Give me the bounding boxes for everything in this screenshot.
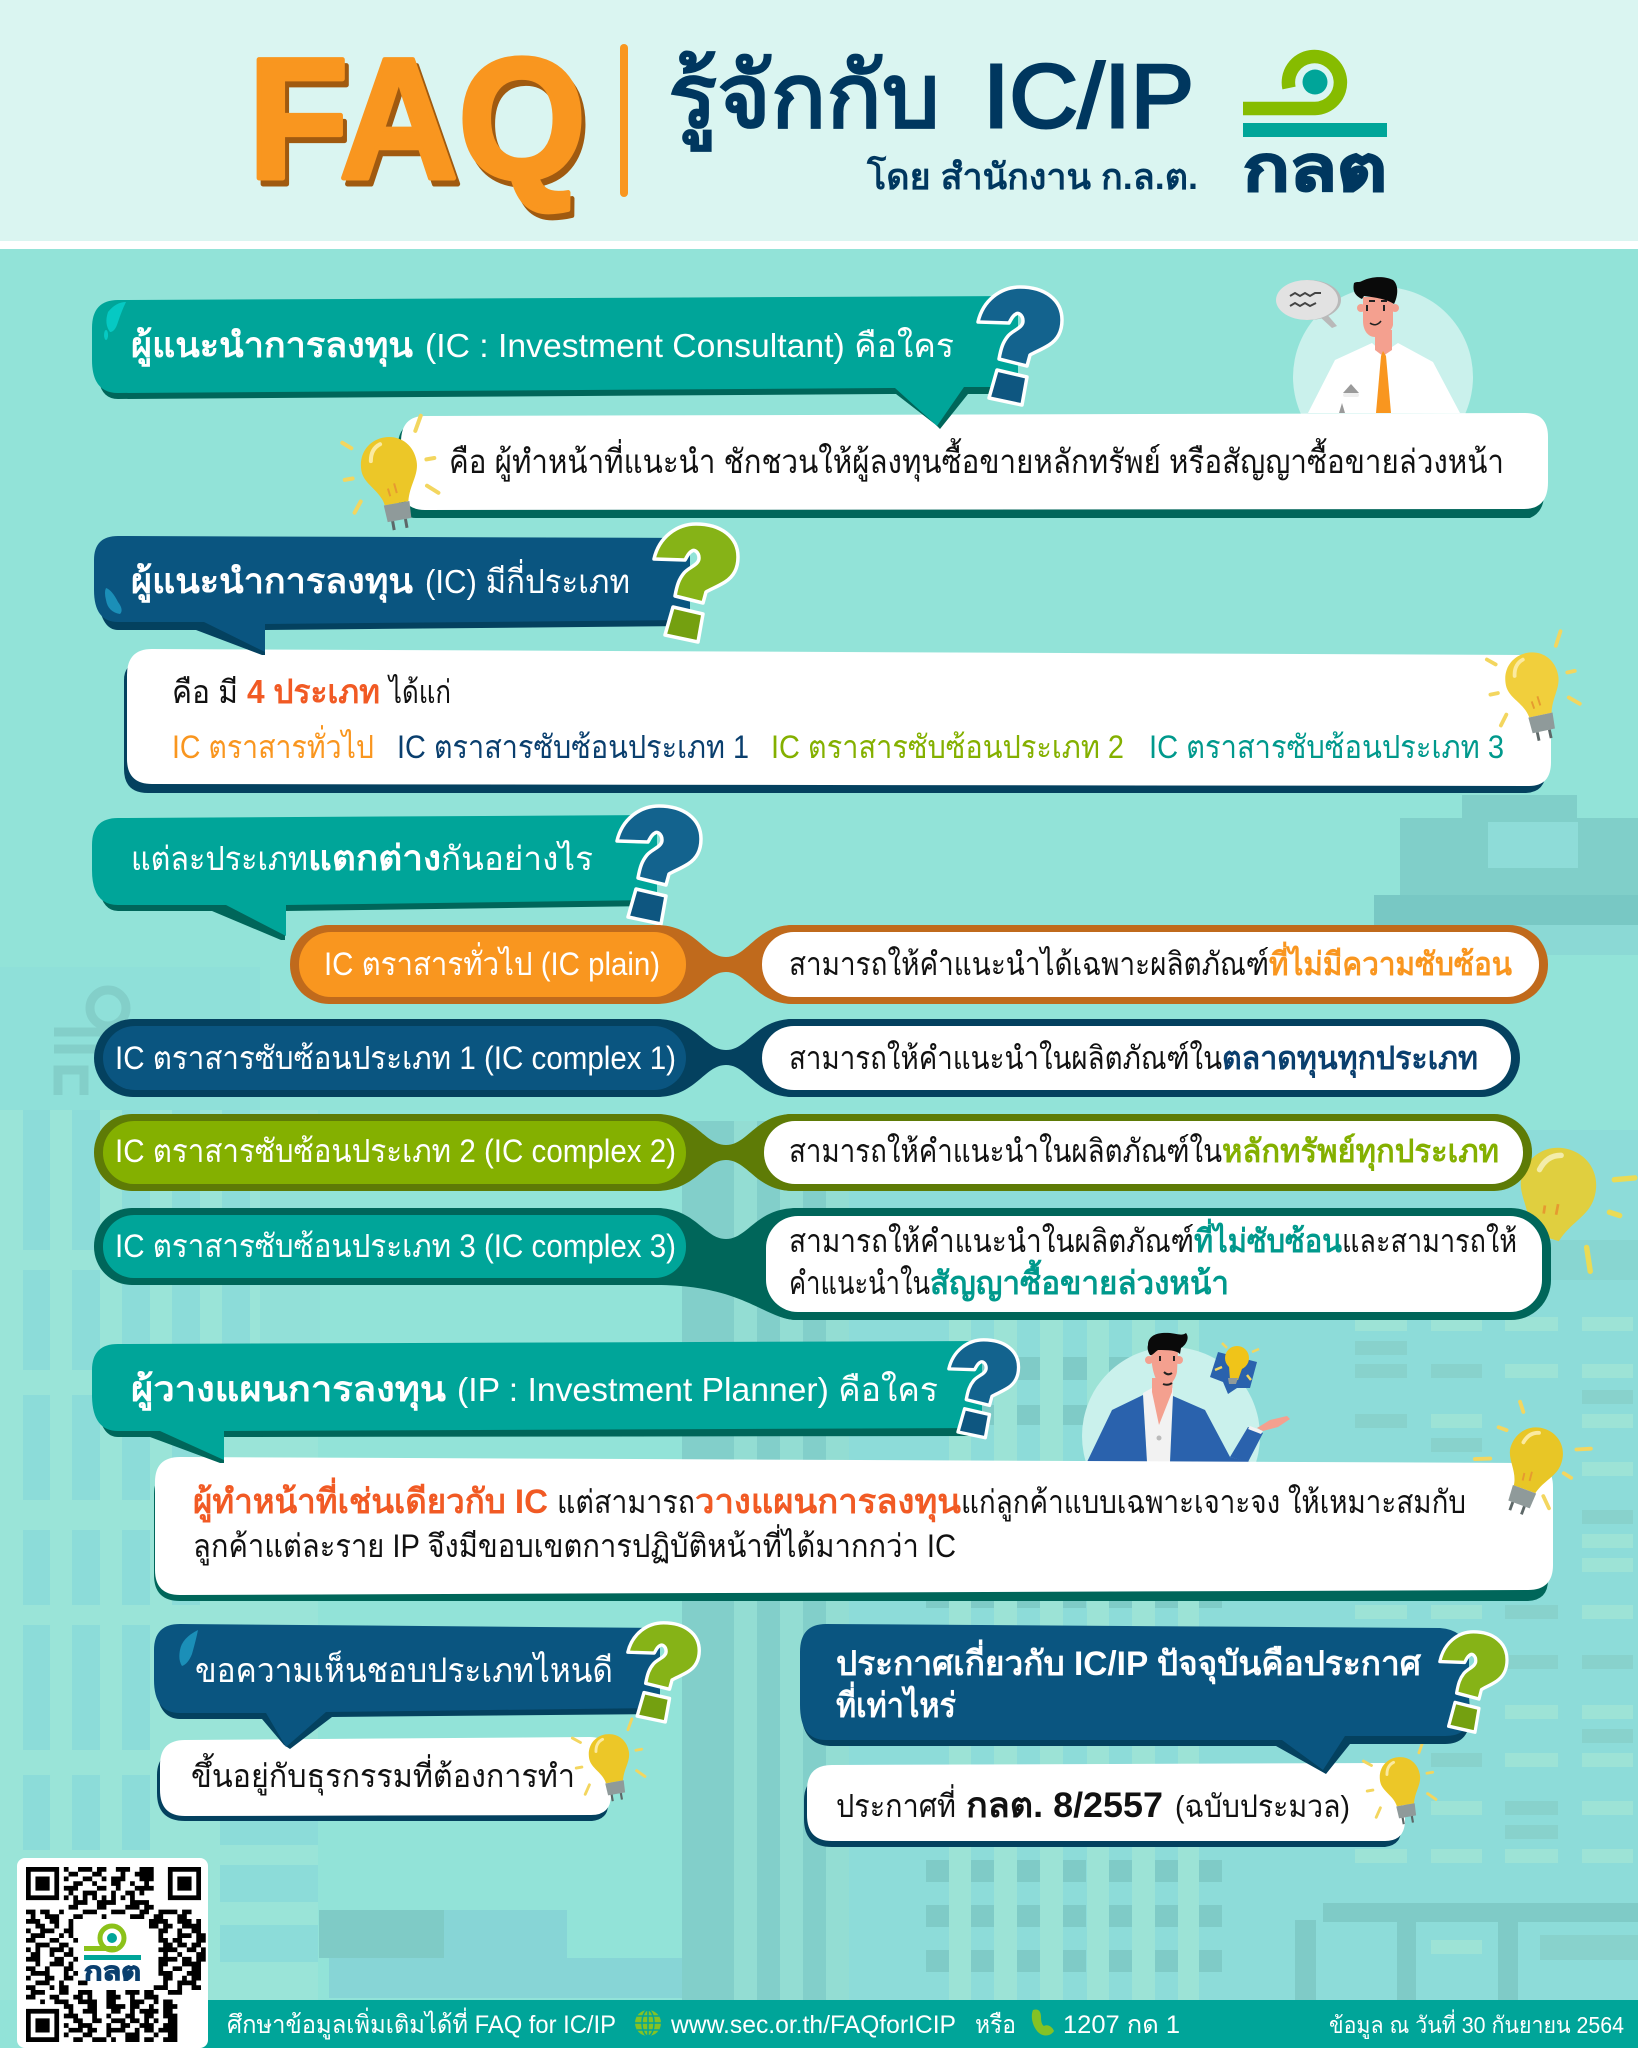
row: IC plain: สามารถให้คำแนะนำได้เฉพาะผลิตภัณฑ์ xyxy=(789,946,1269,982)
heading bubble: which type is suitable xyxy=(154,1624,660,1749)
answer panel: four types xyxy=(124,649,1551,793)
answer panel: current notification xyxy=(804,1763,1405,1847)
illustration: consultant man xyxy=(1293,277,1473,467)
answer panel: IP definition: แก่ลูกค้าแบบเฉพาะเจาะจง ให้เหมาะสมกับ xyxy=(961,1484,1466,1522)
row: IC complex 1: สามารถให้คำแนะนำในผลิตภัณฑ์ใน xyxy=(789,1040,1222,1076)
footer text: data date: ข้อมูล ณ วันที่ 30 กันยายน 2564 xyxy=(1329,2009,1624,2039)
icon: question mark blue xyxy=(617,806,701,924)
heading bubble: how types differ: กันอย่างไร xyxy=(441,840,593,877)
icon: light bulb 1 xyxy=(336,415,445,537)
answer panel: depends on transaction: ขึ้นอยู่กับธุรกรรมที่ต้องการทำ xyxy=(191,1753,575,1796)
heading bubble: how types differ: แต่ละประเภท xyxy=(131,840,308,877)
heading bubble: who is IC xyxy=(92,296,1018,429)
heading bubble: who is IP: ผู้วางแผนการลงทุน xyxy=(131,1370,446,1411)
answer panel: IP definition: ลูกค้าแต่ละราย IP จึงมีขอบเขตการปฏิบัติหน้าที่ได้มากกว่า IC xyxy=(193,1524,956,1566)
header: title: IC/IP xyxy=(983,47,1194,147)
heading bubble: who is IC: (IC : Investment Consultant) คือใคร xyxy=(425,327,954,364)
icon: light bulb 4 xyxy=(1463,1394,1598,1529)
row: IC complex 1: ตลาดทุนทุกประเภท xyxy=(1222,1040,1478,1079)
icon: question mark blue xyxy=(978,287,1062,405)
QR code xyxy=(17,1858,208,2048)
heading bubble: how many IC types: ผู้แนะนำการลงทุน xyxy=(131,562,413,603)
row: IC complex 2: หลักทรัพย์ทุกประเภท xyxy=(1222,1133,1499,1172)
footer text: website: www.sec.or.th/FAQforICIP xyxy=(670,2011,956,2039)
white separator band xyxy=(0,241,1638,249)
background: city buildings xyxy=(0,795,1638,2000)
heading bubble: how types differ xyxy=(92,815,657,940)
row: IC complex 3: และสามารถให้ xyxy=(1342,1223,1517,1259)
answer panel: depends on transaction xyxy=(157,1737,611,1821)
row: IC complex 2 xyxy=(94,1114,1532,1191)
header: title xyxy=(668,47,1194,152)
heading bubble: notification number: ประกาศเกี่ยวกับ IC/IP ปัจจุบันคือประกาศ xyxy=(836,1639,1421,1685)
icon: question mark green xyxy=(628,1623,699,1722)
line: count of types xyxy=(172,673,451,710)
answer panel: IC definition xyxy=(398,413,1548,518)
line: count of types: 4 ประเภท xyxy=(247,673,380,710)
answer panel: IP definition: วางแผนการลงทุน xyxy=(695,1483,961,1523)
line: count of types: คือ มี xyxy=(172,674,238,710)
header: divider bar xyxy=(620,44,628,197)
icon: question mark green xyxy=(1440,1632,1507,1732)
heading bubble: which type is suitable: ขอความเห็นชอบประเภทไหนดี xyxy=(195,1650,613,1690)
icon: phone xyxy=(1032,2009,1054,2035)
heading bubble: how many IC types xyxy=(94,536,690,655)
answer panel: IP definition: แต่สามารถ xyxy=(557,1484,695,1520)
row: IC complex 1: IC ตราสารซับซ้อนประเภท 1 (IC complex 1) xyxy=(115,1040,676,1076)
header: FAQ wordmark: FAQ xyxy=(248,23,586,215)
row: IC plain: ที่ไม่มีความซับซ้อน xyxy=(1269,941,1512,982)
footer bar xyxy=(200,2000,1638,2048)
footer text: more information: ศึกษาข้อมูลเพิ่มเติมได้ที่ FAQ for IC/IP xyxy=(227,2007,616,2040)
row: IC complex 3: ที่ไม่ซับซ้อน xyxy=(1194,1218,1342,1259)
QR code: กลต xyxy=(84,1958,141,1986)
heading bubble: how types differ: แตกต่าง xyxy=(308,839,441,878)
icon: large light bulb behind rows xyxy=(1500,1138,1637,1275)
row: IC plain: IC ตราสารทั่วไป (IC plain) xyxy=(324,942,660,982)
header background xyxy=(0,0,1638,241)
row: IC complex 2: IC ตราสารซับซ้อนประเภท 2 (IC complex 2) xyxy=(115,1133,676,1169)
icon: globe xyxy=(635,2010,661,2036)
background: faded logo xyxy=(54,990,126,1095)
row: IC complex 1 xyxy=(94,1019,1520,1097)
header: SEC logo xyxy=(1243,57,1387,204)
heading bubble: how many IC types: (IC) มีกี่ประเภท xyxy=(425,559,630,600)
answer panel: current notification: กลต. 8/2557 xyxy=(966,1786,1163,1825)
line: list of types: IC ตราสารซับซ้อนประเภท 2 xyxy=(771,729,1124,765)
icon: question mark green xyxy=(654,524,738,642)
line: list of types: IC ตราสารซับซ้อนประเภท 3 xyxy=(1149,729,1504,765)
answer panel: IC definition: คือ ผู้ทำหน้าที่แนะนำ ชักชวนให้ผู้ลงทุนซื้อขายหลักทรัพย์ หรือสัญญาซื้อขายล่วงหน้า xyxy=(449,438,1504,482)
answer panel: IP definition: ผู้ทำหน้าที่เช่นเดียวกับ IC xyxy=(193,1477,548,1523)
header: subtitle: โดย สำนักงาน ก.ล.ต. xyxy=(866,155,1198,197)
footer text: hotline: 1207 กด 1 xyxy=(1063,2011,1180,2039)
row: IC complex 2: สามารถให้คำแนะนำในผลิตภัณฑ์ใน xyxy=(789,1133,1222,1169)
row: IC complex 3: IC ตราสารซับซ้อนประเภท 3 (IC complex 3) xyxy=(115,1228,676,1264)
illustration: planner man xyxy=(1082,1333,1290,1525)
icon: light bulb 2 xyxy=(1481,630,1587,749)
line: list of types: IC ตราสารทั่วไป xyxy=(172,725,374,765)
icon: bulb in speech bubble xyxy=(1210,1343,1259,1394)
row: IC complex 3: สามารถให้คำแนะนำในผลิตภัณฑ์ xyxy=(789,1223,1194,1259)
header: FAQ wordmark: FAQ xyxy=(252,29,590,221)
header: SEC logo: กลต xyxy=(1243,135,1387,204)
icon: question mark blue xyxy=(949,1340,1019,1438)
heading bubble: who is IC: ผู้แนะนำการลงทุน xyxy=(131,326,413,367)
header: title: รู้จักกับ xyxy=(668,47,940,152)
row: IC complex 3 xyxy=(94,1208,1551,1320)
icon: light bulb 5 xyxy=(569,1718,650,1806)
heading bubble: who is IP: (IP : Investment Planner) คือใคร xyxy=(457,1371,938,1408)
line: list of types: IC ตราสารซับซ้อนประเภท 1 xyxy=(397,729,749,765)
heading bubble: notification number: ที่เท่าไหร่ xyxy=(836,1681,957,1725)
answer panel: current notification: (ฉบับประมวล) xyxy=(1175,1789,1350,1824)
line: count of types: ได้แก่ xyxy=(387,674,451,710)
icon: speech bubble xyxy=(1276,280,1341,328)
row: IC plain xyxy=(290,925,1548,1004)
heading bubble: who is IP xyxy=(92,1341,982,1463)
row: IC complex 3: สัญญาซื้อขายล่วงหน้า xyxy=(930,1259,1229,1302)
row: IC complex 3: คำแนะนำใน xyxy=(789,1265,930,1301)
line: list of types xyxy=(172,725,1504,765)
icon: light bulb 6 xyxy=(1360,1741,1441,1829)
footer text: or: หรือ xyxy=(975,2011,1016,2039)
heading bubble: notification number xyxy=(800,1624,1470,1774)
answer panel: IP definition xyxy=(154,1457,1553,1601)
answer panel: current notification: ประกาศที่ xyxy=(836,1784,956,1824)
